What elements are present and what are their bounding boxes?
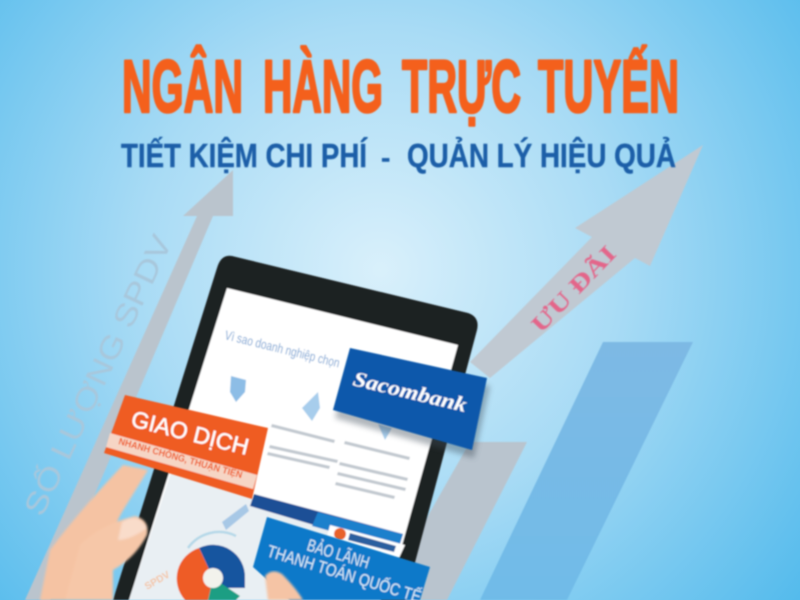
tablet screen [129,288,458,600]
blue rising bar [480,342,693,600]
finger over card [265,571,303,600]
brand logo strip [326,525,405,558]
title: TRỰC [402,45,521,128]
card shadow: Sacombank [335,356,490,458]
subtitle [121,137,676,174]
brand name: Sacombank [351,367,470,417]
title: NGÂN [122,45,243,128]
icon: rocket [302,392,320,421]
card face [104,395,268,499]
card: transaction [104,395,268,499]
feature text columns [267,424,410,499]
logo name [348,533,396,552]
arrow: right gray arrow [470,145,703,378]
screen heading: Vì sao doanh nghiệp chọn [223,327,341,370]
card face [333,348,487,450]
card face [253,517,430,600]
band text: NHANH CHÓNG, THUẬN TIỆN [117,435,244,481]
white band [106,433,257,489]
donut: green segment [208,578,240,600]
hand holding the tablet [40,465,148,600]
title: HÀNG [263,45,383,128]
outer arc [188,532,236,548]
donut: blue segment [199,545,245,588]
title: TUYẾN [538,45,679,128]
card line one: BẢO LÃNH [305,536,372,573]
subtitle: TIẾT KIỆM CHI PHÍ [121,137,368,174]
label: incentives: ƯU ĐÃI [527,241,621,337]
card: guarantee [253,517,430,600]
tablet [113,256,478,600]
data icon [222,504,249,530]
chart note: SPDV [143,569,172,593]
thumb [65,516,148,600]
tablet body [113,256,478,600]
subtitle: QUẢN LÝ HIỆU QUẢ [407,137,676,174]
arrow: left gray arrow [25,170,233,600]
gray rising bar [380,442,527,600]
donut chart [177,532,245,600]
donut center [203,568,223,588]
title [122,45,679,128]
label: products count: SỐ LƯỢNG SPDV [16,229,179,521]
card: Sacombank [333,348,487,450]
strip blue segment [312,512,403,550]
icon: shield [230,376,246,402]
navy strip [250,494,403,550]
donut: orange segment [177,548,213,600]
card heading: GIAO DỊCH [129,406,252,460]
logo mark [334,528,346,540]
screen lower section [129,470,400,600]
thumbnail [118,518,147,540]
subtitle: - [381,142,390,173]
icon: small marker [378,424,392,440]
palm and index finger [40,465,148,600]
